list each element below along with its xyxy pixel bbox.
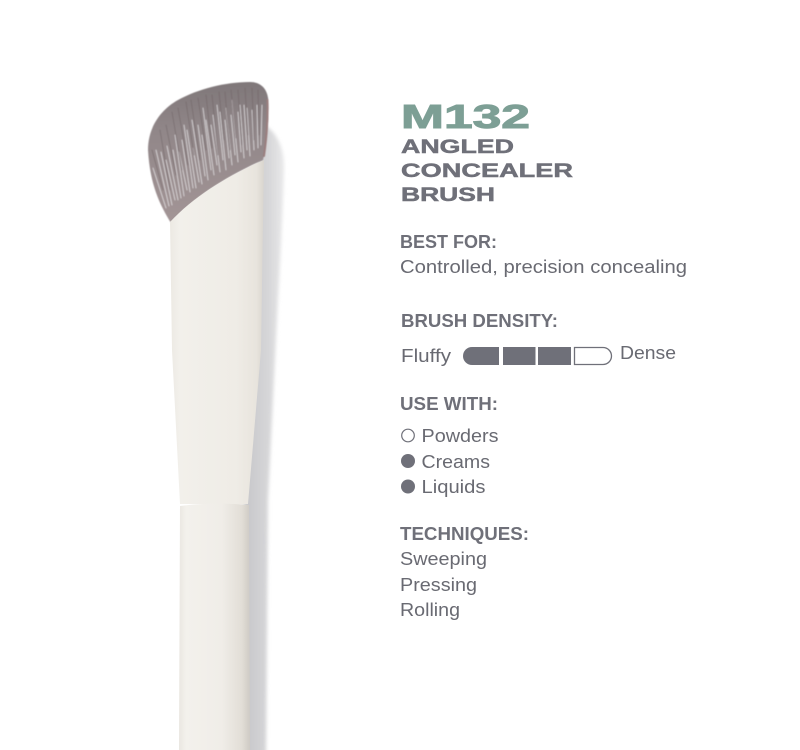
brush density section — [401, 310, 676, 366]
use with section — [400, 393, 498, 497]
product name — [401, 136, 573, 206]
techniques section — [400, 523, 529, 620]
option: powders: Powders — [422, 425, 498, 446]
brush density section: Dense — [620, 342, 676, 363]
product name: BRUSH — [401, 184, 495, 206]
use with section: USE WITH: — [400, 393, 498, 414]
option: creams: Creams — [422, 451, 490, 472]
best for section — [400, 231, 687, 277]
brush density section: Fluffy — [401, 345, 452, 366]
techniques section: Pressing — [400, 574, 477, 595]
techniques section: Rolling — [400, 599, 460, 620]
product name: ANGLED — [401, 136, 514, 158]
brush ferrule — [170, 160, 264, 504]
option: liquids: Liquids — [422, 476, 486, 497]
model number: M132 — [401, 98, 530, 135]
density meter — [463, 347, 612, 365]
product name: CONCEALER — [401, 160, 573, 182]
brush handle — [179, 504, 250, 750]
best for section: Controlled, precision concealing — [400, 256, 687, 277]
best for section: BEST FOR: — [400, 231, 497, 252]
techniques section: Sweeping — [400, 548, 487, 569]
brush density section: BRUSH DENSITY: — [401, 310, 558, 331]
brush shadow — [244, 124, 284, 750]
techniques section: TECHNIQUES: — [400, 523, 529, 544]
brush bristles — [148, 82, 269, 223]
title — [401, 98, 573, 206]
brush illustration — [148, 82, 284, 750]
